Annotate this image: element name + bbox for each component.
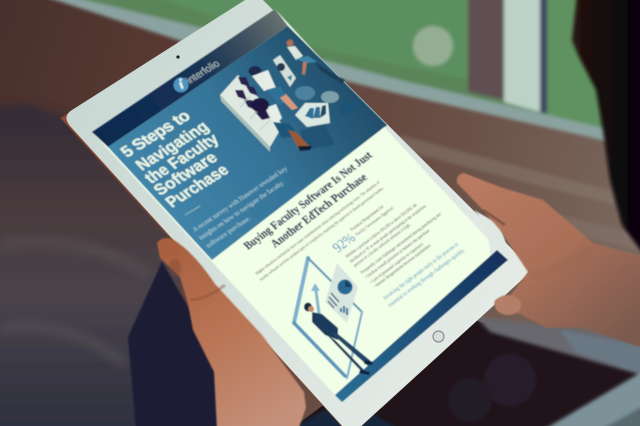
background: person's head silhouette (572, 0, 640, 256)
text: purchase likelihood: Whether a purchase is below $50,000 or above $50,000, the (345, 203, 419, 259)
up arrow (311, 283, 323, 330)
stat label: Potential Requirement for (350, 205, 386, 232)
seated person top (248, 66, 298, 110)
hero divider (185, 206, 200, 215)
tablet camera (176, 55, 180, 59)
hero intro text: insights on how to navigate the faculty (197, 179, 286, 241)
stat label: Faculty Governance Approval (355, 206, 396, 237)
shadow (300, 125, 335, 150)
footer bar (335, 250, 508, 402)
hero title: Software (150, 149, 221, 199)
shelf (220, 75, 283, 152)
text: blue callout: essential to working through challenges quickly. (387, 247, 467, 308)
page illustration: presenter with chart board (294, 258, 373, 378)
text: blue callout: Involving the right people early in the process is (382, 242, 460, 301)
hero illustration (220, 40, 358, 152)
stat label (350, 205, 396, 237)
text: challenges list: Frequently cited challenges encountered during purchasing are: (360, 212, 443, 275)
page heading: Another EdTech Purchase (267, 170, 370, 250)
chart panel (325, 263, 358, 323)
left hand holding tablet (157, 238, 306, 426)
header band (92, 9, 288, 147)
stat: 92%: 92% (330, 231, 359, 256)
page heading: Buying Faculty Software Is Not Just (240, 148, 375, 252)
screen (92, 9, 512, 402)
presenter (304, 302, 373, 375)
text: challenges list: • Internal disagreements between stakeholders (373, 244, 432, 289)
hero intro text: software purchase. (204, 214, 253, 249)
hero panel (108, 26, 387, 260)
hero title (117, 107, 233, 211)
page intro text: faculty software involves another layer of complexity, requiring the approval of shared governance bodies. (258, 186, 386, 282)
frame (294, 258, 362, 378)
logo (174, 58, 223, 92)
tablet body (60, 0, 528, 426)
logo: interfolio (184, 58, 223, 86)
text: challenges list: • Unclear overall priorities to balance the purchase (364, 229, 431, 280)
plants and desk (295, 62, 358, 116)
hero intro text: A recent survey with Hanover revealed key (191, 165, 290, 233)
background: cushion and clothing lower right (290, 316, 640, 426)
floating person (286, 40, 317, 75)
text: purchase likelihood: process of a faculty software solution is high. (353, 223, 412, 268)
right hand holding tablet (457, 173, 640, 349)
wall charts (273, 55, 296, 87)
standing person (251, 98, 312, 151)
hero title: 5 Steps to (117, 107, 194, 161)
bar chart board (295, 103, 330, 127)
text: purchase likelihood: likelihood of 'N' or more people participating in the acquisition (349, 204, 428, 264)
text: challenges list: • Lack of personnel expertise or experience (369, 242, 425, 285)
screen base (92, 9, 508, 402)
page intro text (254, 179, 386, 282)
page intro text: Higher education institutions have many considerations when selecting technology tools. The adoption of (254, 179, 381, 276)
fingertip under tablet (495, 295, 521, 315)
background: floor (0, 105, 190, 426)
tablet home button (433, 331, 444, 342)
hero title: Purchase (162, 161, 233, 211)
hero title: the Faculty (141, 130, 223, 187)
lower right bezel curve (474, 210, 512, 262)
hero title: Navigating (132, 118, 213, 174)
background: trousers (128, 262, 226, 426)
